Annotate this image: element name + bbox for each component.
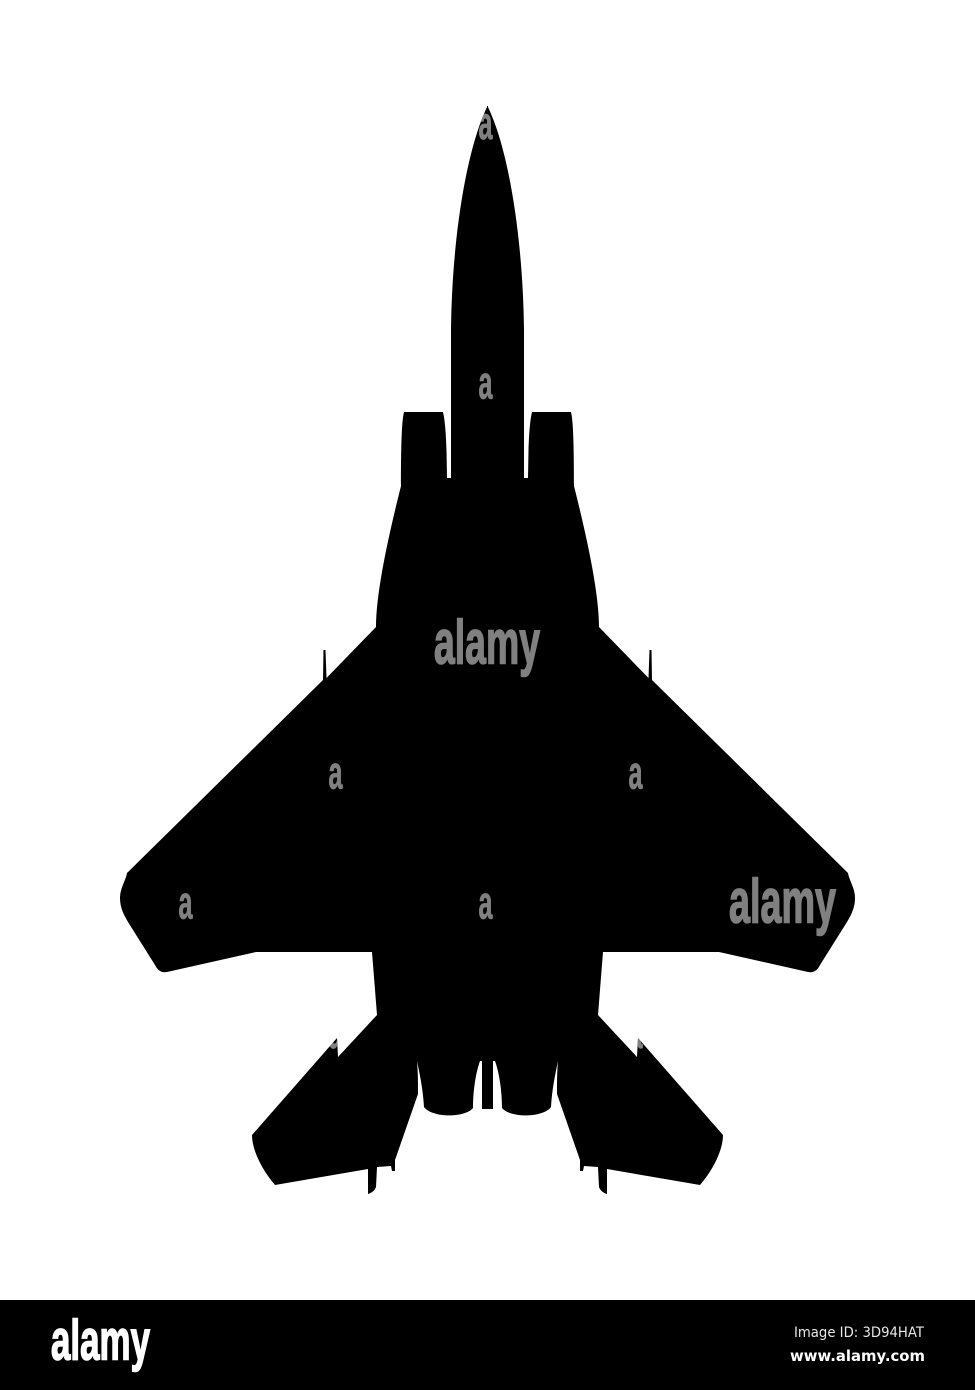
watermark: small letter marks: a xyxy=(478,876,493,928)
watermark: small letter marks: a xyxy=(478,97,493,149)
website: www.alamy.com xyxy=(790,1347,925,1365)
watermark: small letter marks: a xyxy=(478,356,493,408)
watermark: small letter marks: a xyxy=(628,746,643,798)
footer logo: alamy xyxy=(51,1308,150,1372)
watermark: small letter marks: a xyxy=(628,1006,643,1058)
watermark: small letter marks xyxy=(178,97,643,1058)
footer bar xyxy=(0,1300,975,1390)
watermark: centre alamy: alamy xyxy=(434,608,540,678)
jet silhouette xyxy=(120,106,855,1194)
watermark: small letter marks: a xyxy=(328,746,343,798)
watermark: small letter marks: a xyxy=(328,1006,343,1058)
watermark: right wing alamy: alamy xyxy=(729,868,836,936)
watermark: small letter marks: a xyxy=(178,876,193,928)
image id: Image ID: 3D94HAT xyxy=(794,1325,924,1341)
